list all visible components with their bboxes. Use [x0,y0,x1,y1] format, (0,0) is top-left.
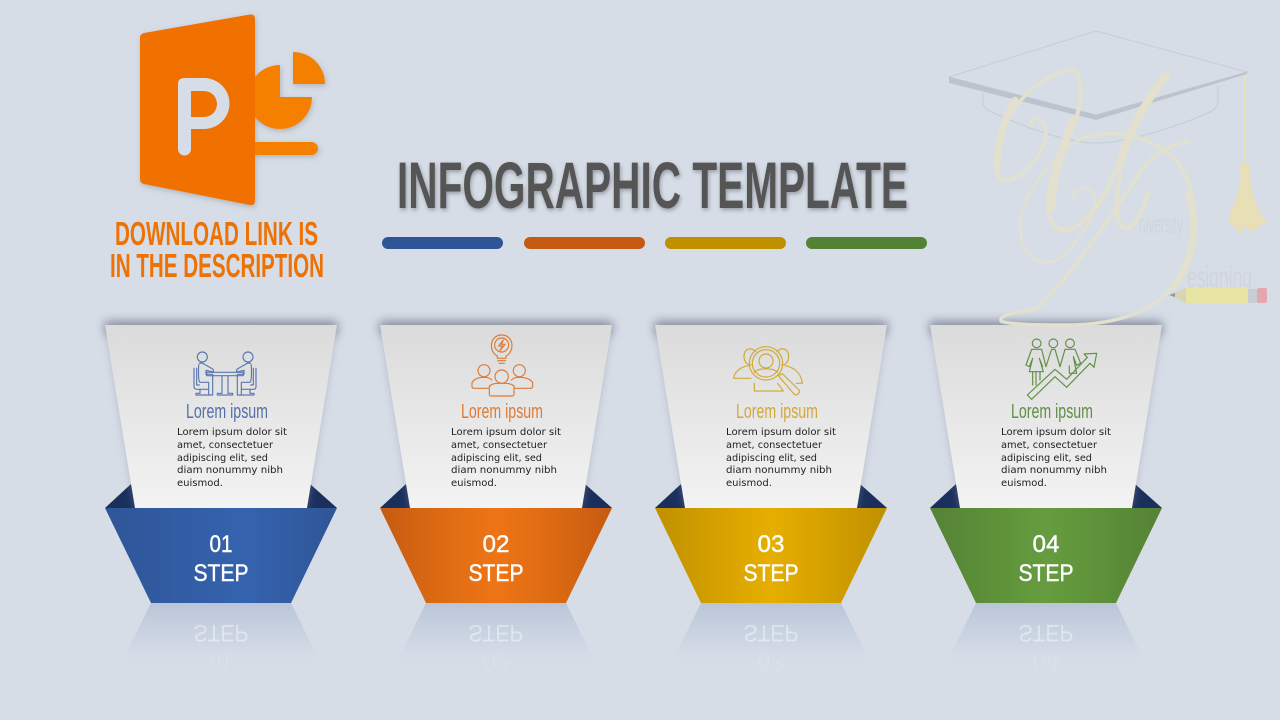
body text: diam nonummy nibh [726,465,832,476]
step label: 03 [758,531,784,558]
body text: euismod. [1001,478,1047,489]
step label: STEP [1018,560,1074,587]
body text: euismod. [451,478,497,489]
icon: tassel [1229,76,1268,234]
download caption: IN THE DESCRIPTION [110,247,324,284]
step label: 02 [482,531,510,558]
icon: people with rising arrow [1026,339,1097,399]
body text: Lorem ipsum dolor sit [177,427,287,438]
download caption: DOWNLOAD LINK IS [115,215,318,252]
reflection: 02 [482,648,510,675]
step label: STEP [744,560,798,587]
reflection [120,603,322,675]
step label [1018,531,1074,587]
reflection [670,603,872,675]
reflection: STEP [194,619,248,646]
heading: Lorem ipsum [461,401,543,423]
icon: graduation cap [949,31,1247,143]
step label: STEP [468,560,524,587]
body text: amet, consectetuer [177,440,274,451]
reflection: STEP [1018,619,1074,646]
icon: pencil [1169,288,1267,303]
heading: Lorem ipsum [186,401,268,423]
heading: Lorem ipsum [736,401,818,423]
step label [744,531,798,587]
body text: diam nonummy nibh [1001,465,1107,476]
body text: amet, consectetuer [451,440,548,451]
panel: step 03 [655,321,887,675]
reflection [945,603,1147,675]
reflection [395,603,597,675]
body text: Lorem ipsum dolor sit [726,427,836,438]
title: INFOGRAPHIC TEMPLATE [397,148,908,222]
body text [1001,427,1111,489]
body text: amet, consectetuer [1001,440,1098,451]
step label: STEP [194,560,248,587]
reflection: 03 [758,648,784,675]
body text [726,427,836,489]
body text: adipiscing elit, sed [177,453,268,464]
body text: Lorem ipsum dolor sit [1001,427,1111,438]
panel: step 04 [930,321,1162,675]
download caption [110,215,324,284]
body text [177,427,287,489]
step label [468,531,524,587]
reflection: STEP [744,619,798,646]
reflection: 01 [210,648,232,675]
icon: PowerPoint logo [140,14,325,205]
body text: euismod. [177,478,223,489]
body text: Lorem ipsum dolor sit [451,427,561,438]
body text: diam nonummy nibh [451,465,557,476]
panel: step 01 [105,321,337,675]
icon: lightbulb over people [472,335,533,396]
body text: diam nonummy nibh [177,465,283,476]
step label [194,531,248,587]
script monogram [995,71,1195,325]
step label: 01 [210,531,232,558]
reflection: 04 [1032,648,1060,675]
body text [451,427,561,489]
body text: adipiscing elit, sed [726,453,817,464]
title colour bars [382,237,927,249]
watermark: university designing logo [949,31,1268,325]
body text: adipiscing elit, sed [451,453,542,464]
icon: magnifier over people [734,347,802,395]
watermark: university designing logo: niversity [1139,209,1183,239]
heading: Lorem ipsum [1011,401,1093,423]
body text: amet, consectetuer [726,440,823,451]
icon: two people at a table [194,352,256,395]
body text: euismod. [726,478,772,489]
reflection: STEP [468,619,524,646]
panel: step 02 [380,321,612,675]
step label: 04 [1032,531,1060,558]
body text: adipiscing elit, sed [1001,453,1092,464]
